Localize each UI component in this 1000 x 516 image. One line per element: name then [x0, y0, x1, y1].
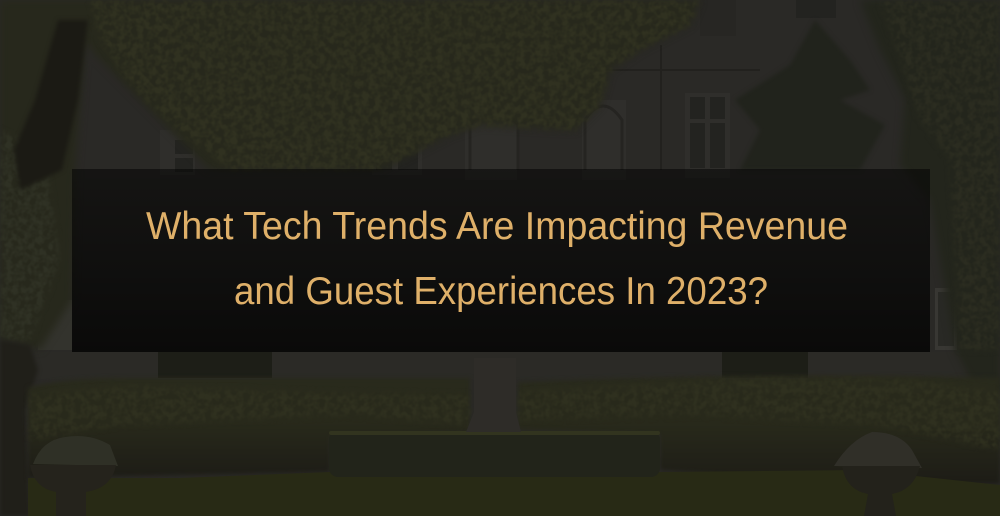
- tree canopy upper left: [0, 0, 700, 350]
- facade base below panel: [35, 352, 1000, 379]
- sunlit hedge tops: [30, 378, 1000, 450]
- hedge row: [28, 376, 1000, 484]
- title line 2: and Guest Experiences In 2023?: [234, 270, 768, 313]
- conifer tree: [735, 20, 885, 170]
- lawn: [28, 470, 1000, 516]
- title line 1: What Tech Trends Are Impacting Revenue: [146, 205, 848, 248]
- right garden urn with flowers: [834, 432, 922, 516]
- building facade windows: [38, 0, 957, 350]
- tree trunk left: [0, 20, 88, 516]
- left garden urn with flowers: [30, 436, 118, 516]
- round clipped hedge: [329, 431, 660, 477]
- tree canopy upper right: [860, 0, 1000, 390]
- dark title panel: [72, 169, 930, 352]
- stone pedestal: [466, 358, 521, 432]
- title text: [146, 205, 848, 313]
- dark tree bases behind hedge: [158, 352, 808, 378]
